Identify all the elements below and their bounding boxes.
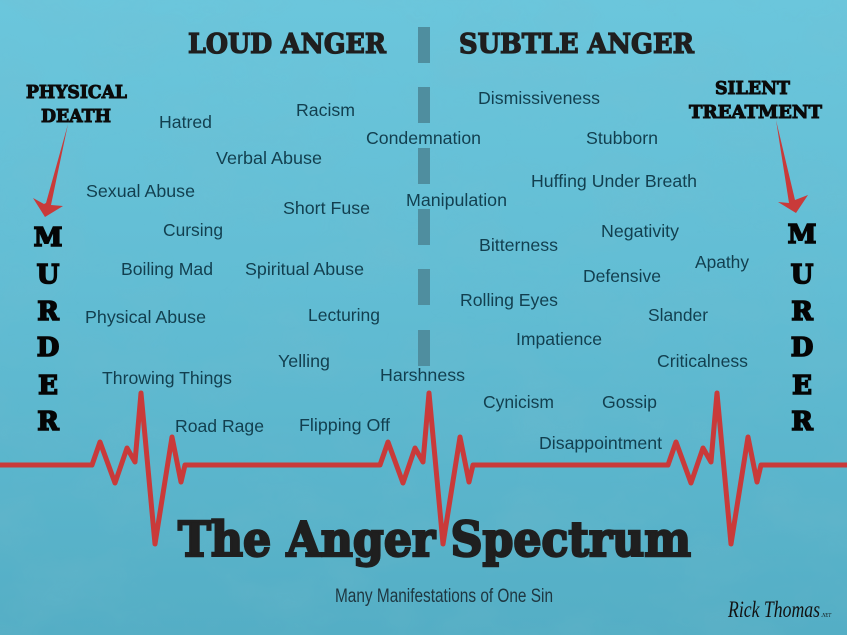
word cloud: subtle anger: Bitterness: [479, 235, 558, 255]
word cloud: loud anger: Cursing: [163, 220, 223, 240]
vertical word: murder right: M: [788, 220, 816, 250]
word cloud: subtle anger: Criticalness: [657, 351, 748, 371]
word cloud: subtle anger: Disappointment: [539, 433, 662, 453]
label: silent treatment: TREATMENT: [689, 102, 823, 123]
vertical word: murder left: M: [34, 223, 62, 253]
word cloud: subtle anger: Manipulation: [406, 190, 507, 210]
vertical word: murder left: E: [38, 371, 58, 401]
word cloud: subtle anger: Defensive: [583, 266, 661, 286]
label: physical death: PHYSICAL: [26, 82, 127, 103]
word cloud: loud anger: Throwing Things: [102, 368, 232, 388]
word cloud: loud anger: Yelling: [278, 351, 330, 371]
vertical word: murder right: U: [791, 260, 814, 290]
heartbeat line: [0, 393, 847, 544]
word cloud: loud anger: Sexual Abuse: [86, 181, 195, 201]
label: silent treatment: [689, 78, 823, 123]
vertical word: murder right: E: [792, 371, 812, 401]
logo: rick thomas signature: Rick Thomas: [727, 597, 820, 622]
word cloud: subtle anger: Impatience: [516, 329, 602, 349]
vertical word: murder right: [788, 220, 816, 437]
word cloud: subtle anger: Slander: [648, 305, 708, 325]
word cloud: loud anger: Physical Abuse: [85, 307, 206, 327]
heading: subtle anger: SUBTLE ANGER: [459, 29, 695, 60]
title: The Anger Spectrum: [178, 512, 691, 568]
subtitle: Many Manifestations of One Sin: [335, 586, 553, 607]
word cloud: loud anger: [85, 100, 481, 436]
word cloud: loud anger: Racism: [296, 100, 355, 120]
dashed divider: [418, 27, 430, 366]
label: physical death: DEATH: [41, 106, 111, 127]
word cloud: subtle anger: [406, 88, 749, 453]
vertical word: murder left: D: [37, 333, 59, 363]
word cloud: subtle anger: Negativity: [601, 221, 679, 241]
word cloud: subtle anger: Apathy: [695, 252, 749, 272]
logo: rick thomas signature: .NET: [821, 613, 832, 619]
word cloud: loud anger: Hatred: [159, 112, 212, 132]
vertical word: murder right: D: [791, 333, 813, 363]
arrow: left down to murder: [33, 124, 68, 217]
word cloud: subtle anger: Cynicism: [483, 392, 554, 412]
heading: loud anger: LOUD ANGER: [188, 29, 387, 60]
word cloud: subtle anger: Rolling Eyes: [460, 290, 558, 310]
label: silent treatment: SILENT: [715, 78, 791, 99]
vertical word: murder left: R: [37, 407, 59, 437]
word cloud: subtle anger: Dismissiveness: [478, 88, 600, 108]
word cloud: loud anger: Condemnation: [366, 128, 481, 148]
vertical word: murder right: R: [791, 297, 813, 327]
word cloud: loud anger: Harshness: [380, 365, 465, 385]
word cloud: loud anger: Verbal Abuse: [216, 148, 322, 168]
label: physical death: [26, 82, 127, 127]
vertical word: murder right: R: [791, 407, 813, 437]
word cloud: loud anger: Lecturing: [308, 305, 380, 325]
word cloud: subtle anger: Gossip: [602, 392, 657, 412]
vertical word: murder left: [34, 223, 62, 437]
word cloud: subtle anger: Stubborn: [586, 128, 658, 148]
word cloud: loud anger: Road Rage: [175, 416, 264, 436]
word cloud: loud anger: Boiling Mad: [121, 259, 213, 279]
vertical word: murder left: U: [37, 260, 60, 290]
arrow: right down to murder: [776, 120, 808, 213]
word cloud: subtle anger: Huffing Under Breath: [531, 171, 697, 191]
word cloud: loud anger: Spiritual Abuse: [245, 259, 364, 279]
word cloud: loud anger: Flipping Off: [299, 415, 390, 435]
vertical word: murder left: R: [37, 297, 59, 327]
word cloud: loud anger: Short Fuse: [283, 198, 370, 218]
